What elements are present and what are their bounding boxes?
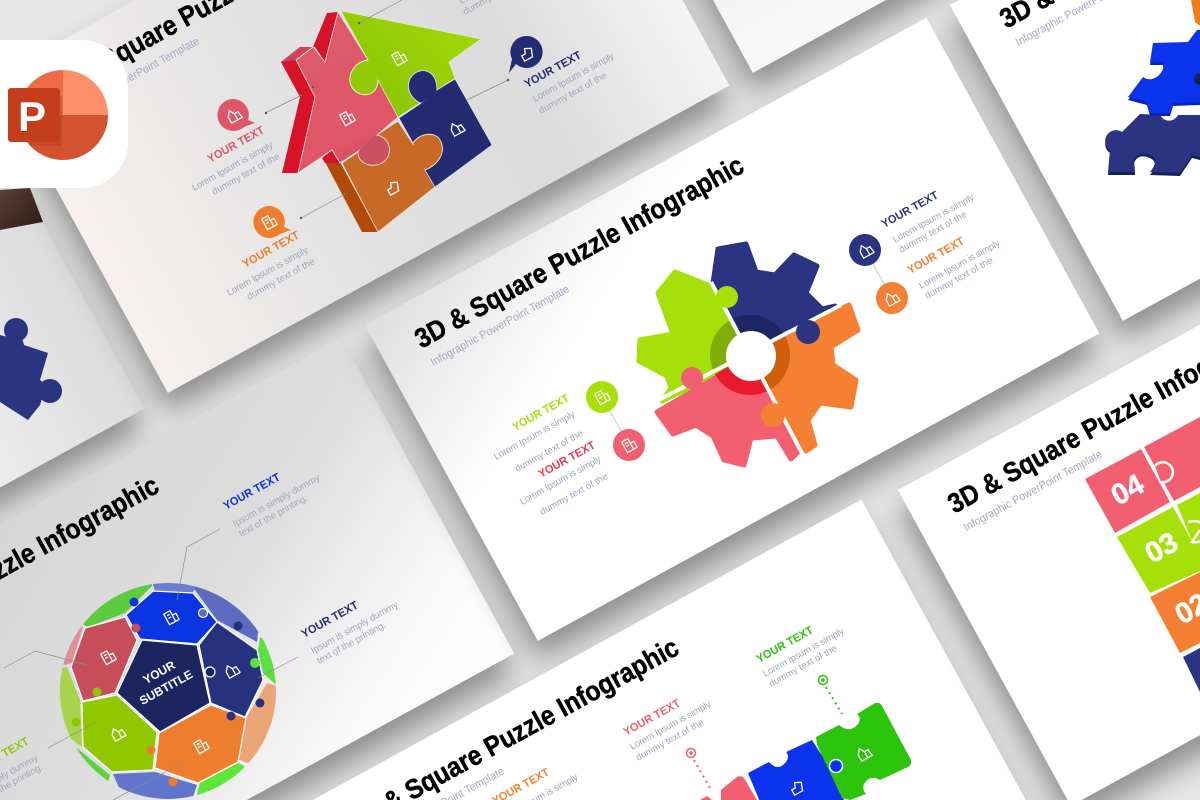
number 04: 04 — [1106, 468, 1150, 512]
gear callout: navy: Lorem Ipsum is simply — [891, 192, 976, 246]
icons in house — [340, 50, 465, 195]
slide: left navy puzzle — [0, 93, 144, 716]
row callout: green: Lorem Ipsum is simply — [761, 626, 846, 680]
dotted connector: pink — [686, 748, 710, 788]
callout: house navy: YOUR TEXT — [523, 50, 584, 91]
row callout: pink: dummy text of the — [634, 717, 706, 764]
row puzzle pieces — [700, 703, 911, 800]
ball callout: navy: text of the printing. — [315, 620, 388, 667]
row callout: pink: YOUR TEXT — [622, 698, 683, 739]
gear callout: orange: YOUR TEXT — [906, 236, 967, 277]
gear callout: pink: Lorem Ipsum is simply — [518, 454, 603, 508]
gear callout: pink: dummy text of the — [538, 471, 610, 518]
soccer ball puzzle — [60, 583, 276, 799]
row callout: green: dummy text of the — [767, 643, 839, 690]
callout: house orange: dummy text of the — [245, 256, 317, 303]
gear callout: green — [492, 381, 618, 475]
centre title: 3D & Square Puzzle Infographic — [409, 149, 749, 354]
number 03: 03 — [1140, 526, 1184, 570]
house leader lines — [265, 0, 509, 219]
slide: numbered square puzzle — [898, 183, 1200, 800]
slide: top middle — [580, 0, 1200, 73]
callout: house pink: Lorem Ipsum is simply — [190, 140, 275, 194]
house 3D puzzle — [281, 11, 492, 232]
gear callout: green: YOUR TEXT — [511, 393, 572, 434]
row callout: pink: Lorem Ipsum is simply — [628, 699, 713, 753]
row callout: green: YOUR TEXT — [755, 625, 816, 666]
callout: house orange — [225, 206, 317, 303]
slide: house puzzle: Infographic PowerPoint Template — [59, 36, 201, 121]
PowerPoint app icon: P — [18, 93, 46, 140]
callout: house navy: dummy text of the — [537, 70, 609, 117]
gear puzzle — [639, 244, 858, 465]
ball callout: navy: YOUR TEXT — [300, 600, 361, 641]
inner ball pieces — [71, 591, 263, 783]
callout: house orange: YOUR TEXT — [241, 230, 302, 271]
slide: bottom row puzzle — [300, 500, 1034, 800]
gear callout: orange: Lorem Ipsum is simply — [917, 238, 1002, 292]
callout: house pink: YOUR TEXT — [206, 125, 267, 166]
ball callout: blue: Ipsum is simply dummy — [231, 472, 322, 530]
ball knobs — [72, 598, 264, 786]
ball callout: blue: text of the printing. — [237, 493, 310, 540]
slide: top right stacked puzzle — [950, 0, 1200, 321]
gear callout: orange — [876, 236, 1002, 314]
gear callout: pink: YOUR TEXT — [537, 440, 598, 481]
ball callout: blue: YOUR TEXT — [222, 472, 283, 513]
ball centre label: SUBTITLE — [137, 667, 195, 708]
dark photo corner — [0, 188, 43, 230]
gear callout: pink — [518, 429, 645, 518]
dotted connector: green — [818, 676, 842, 714]
slide: numbered square puzzle: Infographic PowerPoint Template — [962, 449, 1104, 534]
gear callout: navy — [849, 190, 976, 266]
ball callout: navy: Ipsum is simply dummy — [309, 599, 400, 657]
ball centre label: YOUR — [141, 658, 178, 687]
numbered square puzzle — [1085, 417, 1200, 692]
callout: house orange: Lorem Ipsum is simply — [225, 245, 310, 299]
gear connector lines — [602, 250, 892, 445]
callout: house navy — [509, 36, 616, 117]
navy puzzle piece, left — [0, 318, 62, 420]
gear callout: navy: dummy text of the — [897, 209, 969, 256]
gear callout: navy: YOUR TEXT — [880, 190, 941, 231]
centre subtitle: Infographic PowerPoint Template — [429, 284, 571, 369]
ball callout: green — [0, 736, 45, 800]
gear callout: green: dummy text of the — [513, 428, 585, 475]
gear callout: orange: dummy text of the — [923, 255, 995, 302]
slide: centre gear puzzle — [365, 18, 1099, 641]
slide: house puzzle — [0, 0, 729, 393]
outer ball patches — [60, 583, 276, 799]
callout: house pink: dummy text of the — [210, 151, 282, 198]
ball leader lines — [4, 529, 298, 800]
ball icons — [101, 609, 240, 754]
callout: house pink — [190, 99, 282, 198]
gear callout: green: Lorem Ipsum is simply — [492, 409, 577, 463]
PowerPoint app icon — [0, 40, 128, 188]
row callout: orange — [491, 767, 580, 800]
callout: house navy: Lorem Ipsum is simply — [531, 51, 616, 105]
stacked 3D puzzle pieces — [1105, 0, 1200, 176]
